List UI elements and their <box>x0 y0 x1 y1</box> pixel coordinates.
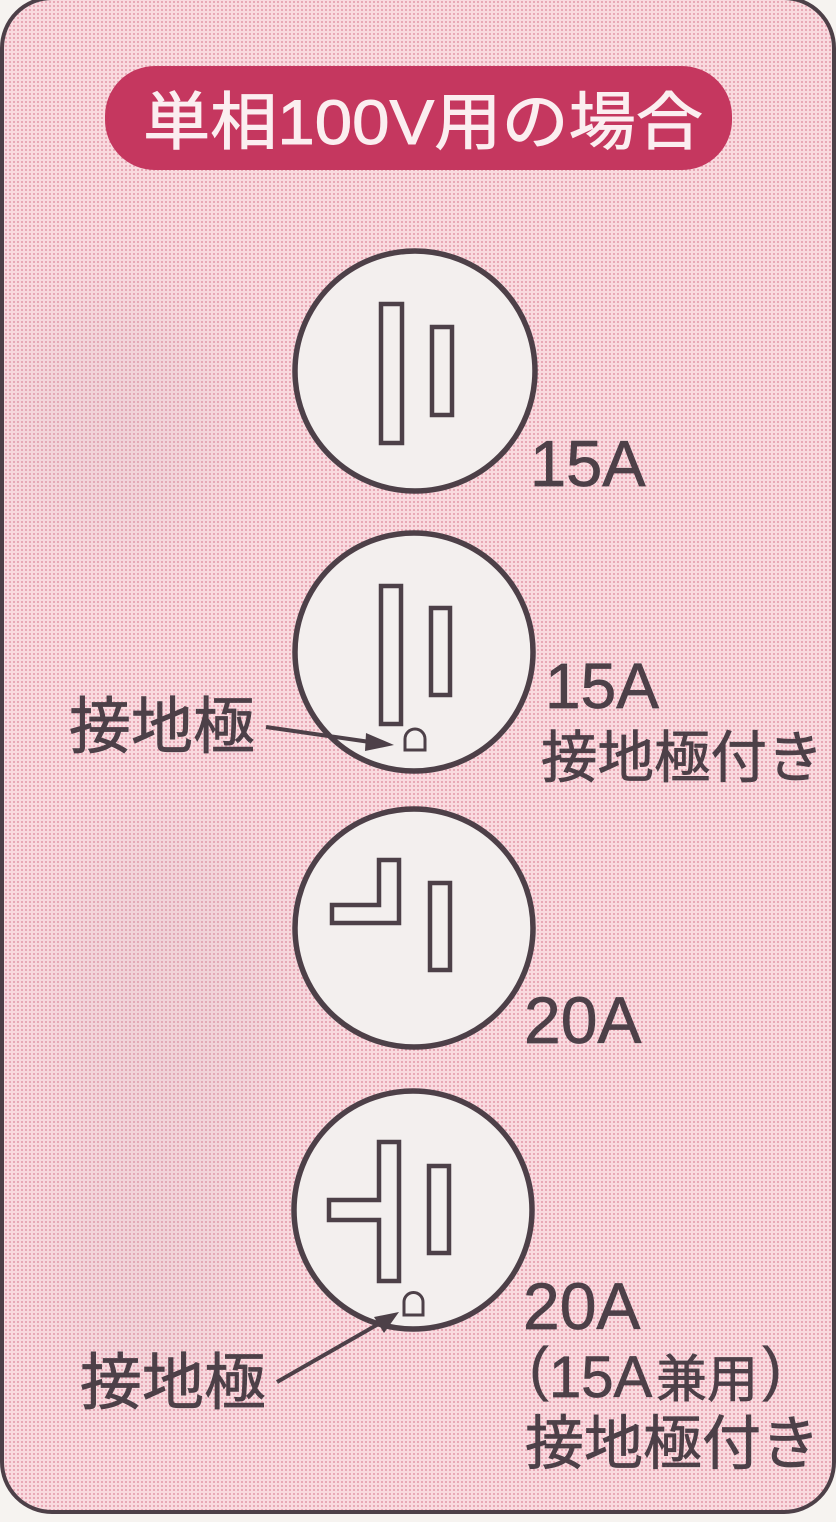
outlet: 15A <box>295 251 535 491</box>
label: grounding pole (upper): 接地極 <box>69 693 255 762</box>
label: grounding pole (lower): 接地極 <box>80 1349 266 1418</box>
label: 20A (15A shared) with grounding pole: 接地極付き <box>525 1411 820 1477</box>
label: 15A with grounding pole: 15A <box>545 650 659 722</box>
label: 15A with grounding pole <box>541 650 824 789</box>
outlet: 20A <box>295 809 533 1047</box>
label: 20A (15A shared) with grounding pole <box>523 1269 820 1477</box>
label: 15A: 15A <box>530 427 646 500</box>
outlet: 20A (15A shared) with grounding pole <box>294 1091 532 1329</box>
label: 20A (15A shared) with grounding pole: 15A <box>549 1345 653 1410</box>
arrow: to upper grounding pole <box>266 727 394 751</box>
label: 20A (15A shared) with grounding pole: 兼用 <box>656 1351 758 1408</box>
arrow: to lower grounding pole <box>277 1312 399 1382</box>
label: 20A: 20A <box>524 983 641 1057</box>
heading: single-phase 100V <box>105 66 732 170</box>
label: 20A (15A shared) with grounding pole: ( <box>529 1335 549 1402</box>
heading: single-phase 100V: 単相100V用の場合 <box>143 88 703 158</box>
label: 20A (15A shared) with grounding pole: 20A <box>523 1269 640 1343</box>
label: 15A with grounding pole: 接地極付き <box>541 726 824 789</box>
label: 20A (15A shared) with grounding pole: ) <box>762 1335 782 1402</box>
outlet: 15A with grounding pole <box>295 533 533 771</box>
